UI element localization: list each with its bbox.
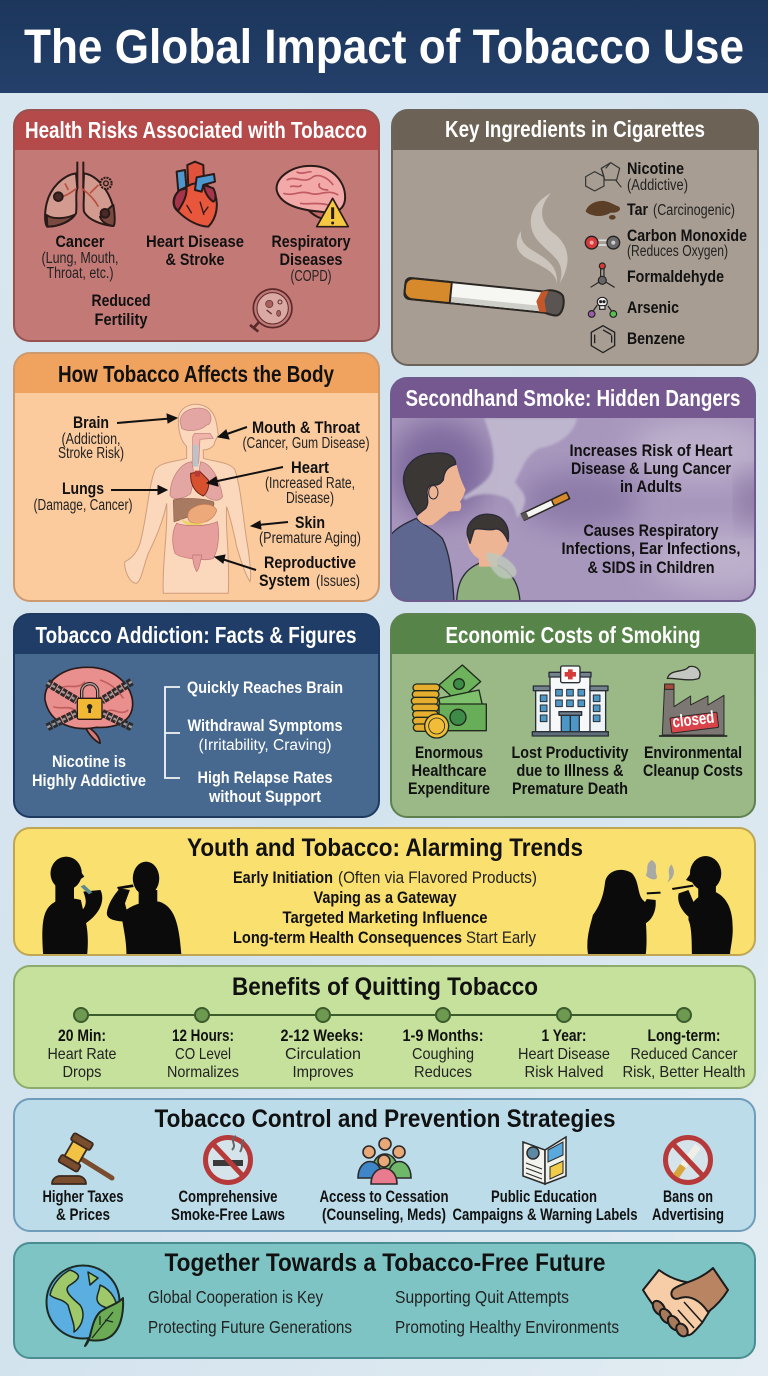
text: mouth and throat: Mouth & Throat bbox=[252, 418, 360, 437]
text: 2-12 weeks: Circulation bbox=[285, 1046, 361, 1063]
text: taxes: Higher Taxes bbox=[42, 1187, 124, 1206]
text: 12 hours bbox=[167, 1026, 239, 1081]
text: tar bbox=[627, 200, 735, 219]
text: advertising bans: Bans on bbox=[663, 1187, 713, 1206]
panel: secondhand smoke bbox=[390, 378, 768, 602]
text: reduced fertility: Fertility bbox=[94, 310, 148, 329]
illustration: smoke plume bbox=[463, 418, 577, 518]
text: adult risks: Increases Risk of Heart bbox=[570, 441, 733, 460]
text: heart: (Increased Rate, bbox=[265, 475, 355, 492]
panel: key ingredients bbox=[392, 110, 758, 365]
text: future right column bbox=[395, 1287, 619, 1337]
text: child risks: & SIDS in Children bbox=[588, 558, 714, 577]
text: future right column: Supporting Quit Attempts bbox=[395, 1287, 569, 1307]
icon: money bbox=[411, 665, 486, 738]
text: long-term: Risk, Better Health bbox=[622, 1064, 746, 1081]
text: reduced fertility bbox=[92, 291, 150, 329]
text: 20 minutes bbox=[48, 1026, 117, 1081]
text: nicotine bbox=[627, 159, 688, 194]
icon: burning cigarette bbox=[521, 492, 570, 521]
heading: key ingredients: Key Ingredients in Cigarettes bbox=[445, 116, 705, 142]
text: nicotine is highly addictive bbox=[32, 752, 146, 790]
text: long-term: Reduced Cancer bbox=[630, 1046, 738, 1063]
text: adult risks bbox=[570, 441, 733, 496]
icon: advertising ban bbox=[666, 1138, 710, 1182]
text: youth trends list: Start Early bbox=[466, 928, 536, 947]
text: nicotine: (Addictive) bbox=[627, 177, 688, 194]
text: reproductive system: System bbox=[259, 571, 310, 590]
text: future left column: Global Cooperation is Key bbox=[148, 1287, 323, 1307]
text: adult risks: in Adults bbox=[620, 477, 682, 496]
text: lost productivity: Lost Productivity bbox=[512, 743, 629, 762]
heading: control: Tobacco Control and Prevention Strategies bbox=[154, 1105, 616, 1133]
text: advertising bans bbox=[652, 1187, 724, 1224]
text: tar: Tar bbox=[627, 200, 648, 219]
text: relapse rates: without Support bbox=[208, 787, 321, 806]
text: heart disease: & Stroke bbox=[166, 250, 224, 269]
text: 1-9 months: Reduces bbox=[414, 1064, 472, 1081]
heading: body: How Tobacco Affects the Body bbox=[58, 361, 334, 387]
text: 2-12 weeks: 2-12 Weeks: bbox=[280, 1026, 364, 1045]
heading: economic: Economic Costs of Smoking bbox=[446, 622, 700, 648]
text: 20 minutes: 20 Min: bbox=[58, 1026, 106, 1045]
icon: heart bbox=[174, 162, 217, 227]
text: advertising bans: Advertising bbox=[652, 1205, 724, 1224]
text: 20 minutes: Heart Rate bbox=[48, 1046, 117, 1063]
panel: how tobacco affects the body bbox=[14, 353, 379, 601]
text: healthcare expenditure: Expenditure bbox=[408, 779, 490, 798]
icon: benzene bbox=[591, 326, 615, 353]
text: youth trends list: Targeted Marketing Influence bbox=[282, 908, 488, 927]
text: public education: Public Education bbox=[491, 1187, 597, 1206]
heading: health risks: Health Risks Associated with Tobacco bbox=[25, 117, 367, 143]
text: lost productivity bbox=[512, 743, 629, 798]
text: cancer bbox=[42, 232, 118, 282]
text: reproductive system bbox=[259, 553, 360, 590]
text: cancer: Throat, etc.) bbox=[46, 265, 114, 282]
title banner bbox=[0, 0, 768, 93]
text: respiratory diseases: Diseases bbox=[280, 250, 342, 269]
text: carbon monoxide: (Reduces Oxygen) bbox=[627, 243, 728, 260]
text: skin bbox=[259, 513, 361, 547]
text: healthcare expenditure: Healthcare bbox=[412, 761, 486, 780]
text: carbon monoxide: Carbon Monoxide bbox=[627, 226, 747, 245]
text: youth trends list: Long-term Health Consequences bbox=[233, 928, 462, 947]
text: 1-9 months bbox=[402, 1026, 484, 1081]
illustration: man bbox=[391, 453, 466, 602]
panel: health risks bbox=[14, 110, 379, 341]
icon: arsenic bbox=[588, 297, 617, 317]
text: reproductive system: Reproductive bbox=[264, 553, 356, 572]
text: future left column: Protecting Future Generations bbox=[148, 1317, 352, 1337]
text: child risks: Infections, Ear Infections, bbox=[562, 539, 740, 558]
heading: future: Together Towards a Tobacco-Free Future bbox=[164, 1249, 606, 1277]
panel: benefits of quitting bbox=[14, 966, 755, 1088]
text: heart disease bbox=[146, 232, 244, 269]
text: 12 hours: Normalizes bbox=[167, 1064, 239, 1081]
text: 1 year: 1 Year: bbox=[542, 1026, 586, 1045]
text: brain: Stroke Risk) bbox=[58, 445, 124, 462]
heading: youth: Youth and Tobacco: Alarming Trends bbox=[187, 834, 583, 862]
text: healthcare expenditure: Enormous bbox=[415, 743, 483, 762]
text: lungs bbox=[34, 479, 132, 514]
icon: closed factory bbox=[659, 666, 727, 736]
text: 12 hours: CO Level bbox=[175, 1046, 231, 1063]
heading: benefits: Benefits of Quitting Tobacco bbox=[232, 973, 538, 1001]
text: withdrawal symptoms: (Irritability, Craving) bbox=[198, 737, 332, 754]
text: brain: (Addiction, bbox=[62, 431, 120, 448]
chart: quitting timeline bbox=[74, 1008, 691, 1022]
illustration: child bbox=[457, 514, 520, 602]
text: 1 year: Heart Disease bbox=[518, 1046, 610, 1063]
text: heart: Disease) bbox=[286, 490, 334, 507]
text: child risks: Causes Respiratory bbox=[584, 521, 719, 540]
text: cessation access: Access to Cessation bbox=[320, 1187, 448, 1206]
text: relapse rates: High Relapse Rates bbox=[198, 768, 332, 787]
text: respiratory diseases: (COPD) bbox=[290, 268, 332, 285]
icon: formaldehyde bbox=[591, 263, 615, 287]
text: 1 year bbox=[518, 1026, 610, 1081]
text: youth trends list: Early Initiation bbox=[233, 868, 333, 887]
text: lungs: (Damage, Cancer) bbox=[34, 497, 132, 514]
text: skin: Skin bbox=[295, 513, 325, 532]
text: respiratory diseases: Respiratory bbox=[272, 232, 351, 251]
text: taxes: & Prices bbox=[56, 1205, 110, 1224]
text: smoke-free laws: Smoke-Free Laws bbox=[171, 1205, 285, 1224]
text: brain: Brain bbox=[73, 413, 109, 432]
text: reduced fertility: Reduced bbox=[92, 291, 150, 310]
text: youth trends list: (Often via Flavored Products) bbox=[338, 868, 537, 887]
text: smoke-free laws bbox=[171, 1187, 285, 1224]
text: public education: Campaigns & Warning Labels bbox=[452, 1205, 638, 1224]
text: cleanup costs: Cleanup Costs bbox=[643, 761, 743, 780]
text: public education bbox=[452, 1187, 638, 1224]
text: withdrawal symptoms: Withdrawal Symptoms bbox=[188, 716, 342, 735]
text: heart bbox=[265, 458, 355, 507]
text: heart disease: Heart Disease bbox=[146, 232, 244, 251]
icon: no smoking bbox=[206, 1136, 250, 1182]
text: long-term bbox=[622, 1026, 746, 1081]
text: taxes bbox=[42, 1187, 124, 1224]
text: 1-9 months: Coughing bbox=[412, 1046, 474, 1063]
icon: support group bbox=[358, 1138, 411, 1184]
text: youth trends list bbox=[233, 868, 537, 947]
arrows: body callouts bbox=[111, 414, 288, 570]
illustration: human body with organs bbox=[125, 404, 251, 593]
icon: damaged lungs bbox=[45, 162, 115, 227]
text: 1 year: Risk Halved bbox=[524, 1064, 604, 1081]
icon: globe and leaf bbox=[46, 1266, 123, 1346]
text: tar: (Carcinogenic) bbox=[653, 202, 735, 219]
text: arsenic: Arsenic bbox=[627, 298, 679, 317]
text: 1-9 months: 1-9 Months: bbox=[402, 1026, 484, 1045]
text: future right column: Promoting Healthy Environments bbox=[395, 1317, 619, 1337]
icon: cigarette bbox=[404, 276, 565, 316]
text: child risks bbox=[562, 521, 740, 577]
text: 2-12 weeks bbox=[280, 1026, 364, 1081]
text: respiratory diseases bbox=[272, 232, 351, 285]
icon: fertility bbox=[250, 289, 292, 332]
text: 12 hours: 12 Hours: bbox=[172, 1026, 234, 1045]
panel: addiction facts bbox=[14, 614, 379, 817]
icon: gavel bbox=[52, 1133, 112, 1184]
label: closed sign: closed bbox=[671, 708, 715, 732]
text: youth trends list: Vaping as a Gateway bbox=[314, 888, 457, 907]
text: carbon monoxide bbox=[627, 226, 747, 260]
text: healthcare expenditure bbox=[408, 743, 490, 798]
icon: smoke bbox=[517, 193, 568, 283]
icon: brain with warning bbox=[277, 166, 348, 227]
text: cleanup costs: Environmental bbox=[644, 743, 742, 762]
text: cessation access bbox=[320, 1187, 448, 1224]
icon: handshake bbox=[643, 1268, 728, 1339]
text: relapse rates bbox=[198, 768, 332, 806]
text: nicotine: Nicotine bbox=[627, 159, 684, 178]
text: cancer: (Lung, Mouth, bbox=[42, 250, 118, 267]
text: reaches brain: Quickly Reaches Brain bbox=[187, 678, 343, 697]
text: 2-12 weeks: Improves bbox=[292, 1064, 354, 1081]
panel: economic costs bbox=[391, 614, 755, 817]
text: smoke-free laws: Comprehensive bbox=[178, 1187, 278, 1206]
text: nicotine is highly addictive: Nicotine is bbox=[52, 752, 126, 771]
text: cessation access: (Counseling, Meds) bbox=[322, 1205, 446, 1224]
icon: carbon monoxide bbox=[585, 236, 620, 249]
text: long-term: Long-term: bbox=[648, 1026, 720, 1045]
icon: tar bbox=[586, 201, 620, 220]
text: brain bbox=[58, 413, 124, 462]
text: mouth and throat bbox=[242, 418, 370, 452]
heading: addiction: Tobacco Addiction: Facts & Figures bbox=[36, 622, 356, 648]
text: cancer: Cancer bbox=[56, 232, 105, 251]
silhouette: left pair vaping bbox=[42, 857, 181, 954]
text: mouth and throat: (Cancer, Gum Disease) bbox=[242, 435, 370, 452]
text: nicotine is highly addictive: Highly Addictive bbox=[32, 771, 146, 790]
text: heart: Heart bbox=[291, 458, 329, 477]
icon: public education booklet bbox=[523, 1137, 566, 1184]
text: lost productivity: due to Illness & bbox=[516, 761, 624, 780]
text: cleanup costs bbox=[643, 743, 743, 780]
icon: nicotine molecule bbox=[586, 163, 621, 191]
text: withdrawal symptoms bbox=[188, 716, 342, 754]
text: benzene: Benzene bbox=[627, 329, 685, 348]
silhouette: right pair smoking bbox=[587, 856, 733, 954]
text: 20 minutes: Drops bbox=[62, 1064, 102, 1081]
icon: hospital bbox=[532, 666, 608, 736]
text: lost productivity: Premature Death bbox=[512, 779, 628, 798]
text: reproductive system: (Issues) bbox=[316, 573, 360, 590]
text: lungs: Lungs bbox=[62, 479, 104, 498]
text: adult risks: Disease & Lung Cancer bbox=[571, 459, 731, 478]
text: formaldehyde: Formaldehyde bbox=[627, 267, 724, 286]
text: future left column bbox=[148, 1287, 352, 1337]
icon: chained brain with padlock bbox=[45, 667, 133, 743]
panel: youth and tobacco bbox=[14, 828, 755, 955]
text: skin: (Premature Aging) bbox=[259, 530, 361, 547]
panel: tobacco-free future bbox=[14, 1243, 755, 1358]
panel: control and prevention bbox=[14, 1099, 755, 1231]
